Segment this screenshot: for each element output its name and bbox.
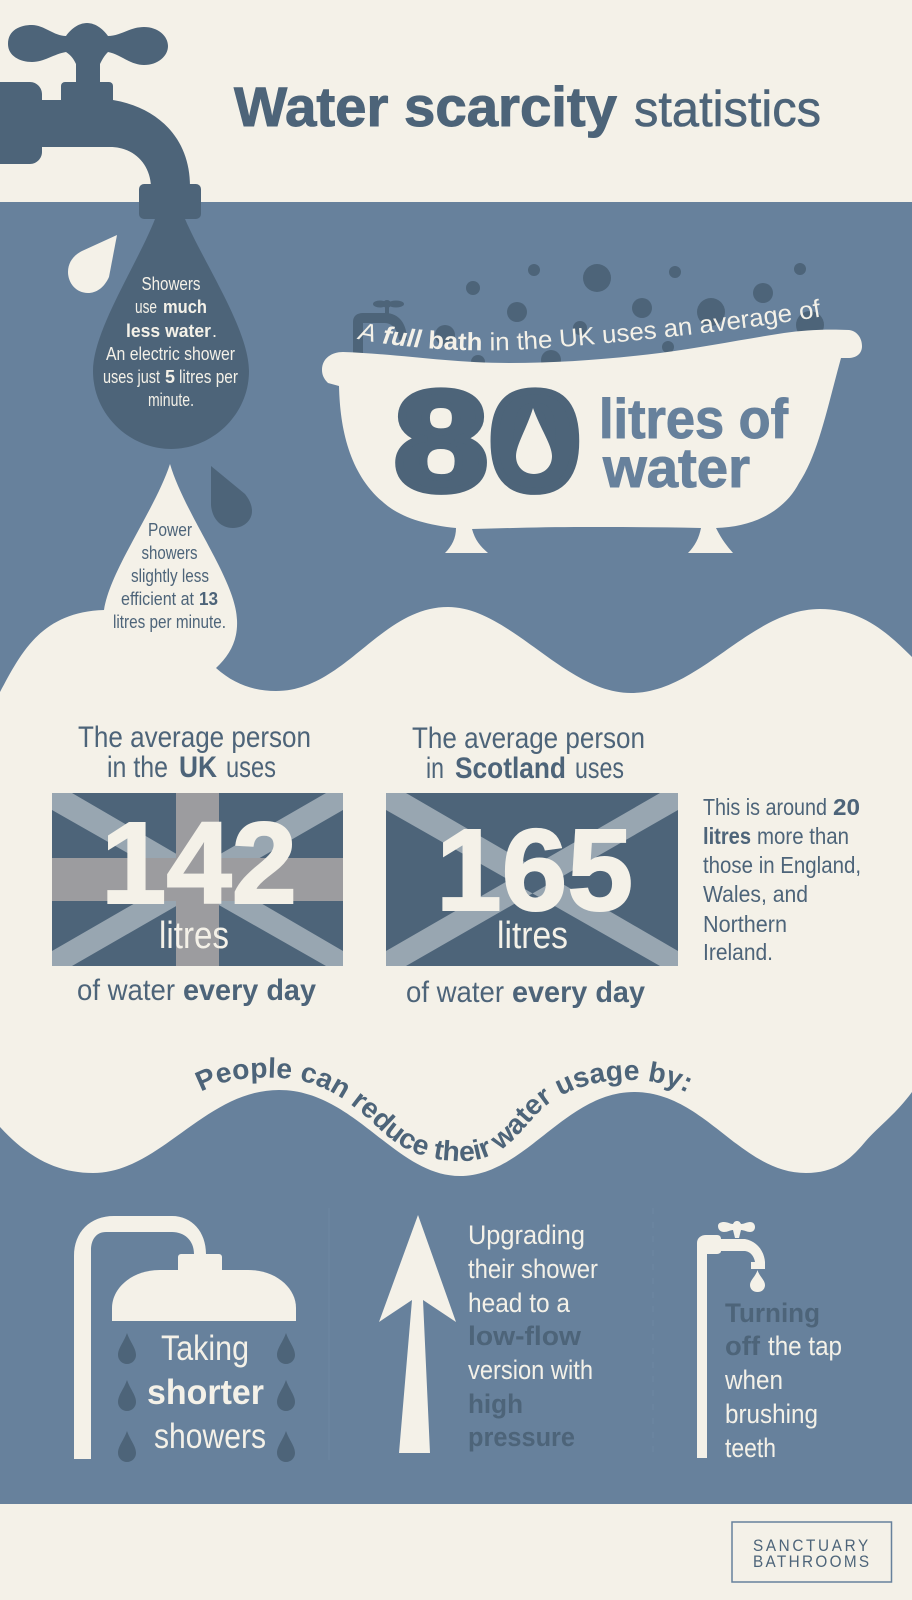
stat: UK heading	[78, 721, 311, 784]
curved heading: reduce water usage: People can reduce their water usage by:	[194, 1057, 691, 1162]
text block: Scotland comparison: 20	[833, 794, 860, 820]
stat: Scotland heading	[412, 722, 645, 785]
icon: shower droplets	[118, 1333, 295, 1462]
icon: bath tap	[353, 300, 407, 360]
shower drop callout: minute.	[148, 390, 194, 410]
bubbles	[435, 263, 824, 370]
title: statistics	[634, 81, 821, 137]
flag: UK with 142 litres: 142	[101, 798, 297, 928]
stat: Scotland heading: in	[426, 752, 444, 785]
power shower drop callout: litres per minute.	[113, 612, 226, 632]
text block: taking shorter showers	[147, 1329, 266, 1456]
stat: UK heading: in the	[107, 751, 168, 784]
flag: UK with 142 litres	[52, 793, 343, 966]
text block: turning off the tap: when	[724, 1365, 783, 1395]
flag: Scotland with 165 litres: litres	[497, 915, 568, 957]
text block: turning off the tap: teeth	[725, 1433, 776, 1463]
text block: turning off the tap: off	[725, 1331, 761, 1361]
text block: low-flow shower head: high	[468, 1389, 523, 1419]
stat: Scotland every day	[406, 976, 645, 1009]
text block: Scotland comparison: those in England,	[703, 852, 861, 878]
icon: small cream droplet	[68, 235, 117, 293]
text block: Scotland comparison: This is around	[703, 794, 827, 820]
stat: Scotland heading: The average person	[412, 722, 645, 755]
text block: low-flow shower head	[468, 1220, 598, 1452]
power shower drop callout: Power	[148, 520, 192, 540]
power shower drop callout	[104, 464, 237, 692]
stat: UK heading: The average person	[78, 721, 311, 754]
power shower drop callout: 13	[199, 589, 218, 609]
shower drop callout: much	[163, 297, 207, 317]
text block: low-flow shower head: version with	[468, 1355, 593, 1385]
text block: turning off the tap: brushing	[725, 1399, 818, 1429]
text block: taking shorter showers: showers	[154, 1417, 266, 1456]
text block: turning off the tap: Turning	[725, 1298, 820, 1328]
icon: small dark droplet	[211, 466, 252, 528]
stat: UK every day: every day	[183, 974, 316, 1007]
logo: Sanctuary Bathrooms: BATHROOMS	[753, 1552, 869, 1571]
text block: low-flow shower head: head to a	[468, 1288, 571, 1318]
shower drop callout: uses just	[103, 367, 160, 387]
stat: Scotland heading: Scotland	[455, 752, 566, 785]
stat: Scotland every day: every day	[512, 976, 645, 1009]
flag: UK with 142 litres: litres	[159, 915, 229, 957]
icon: shower	[74, 1216, 296, 1459]
icon: bathtub	[322, 330, 862, 553]
power shower drop callout: showers	[142, 543, 198, 563]
big number: 80: 80	[394, 362, 582, 521]
stat: Scotland every day: of water	[406, 976, 504, 1009]
shower drop callout	[93, 219, 249, 449]
curved bath caption: A full bath in the UK uses an average of	[356, 298, 820, 350]
shower drop callout: litres per	[179, 367, 238, 387]
text block: low-flow shower head: low-flow	[468, 1321, 582, 1351]
text block: taking shorter showers: shorter	[147, 1373, 264, 1412]
shower drop callout: use	[135, 297, 157, 317]
bath caption: litres of water	[599, 387, 788, 499]
stat: UK every day	[77, 974, 316, 1007]
shower drop callout: less water	[126, 321, 211, 341]
shower drop callout: Showers	[142, 274, 200, 294]
stat: UK heading: uses	[226, 751, 276, 784]
text block: taking shorter showers: Taking	[161, 1329, 249, 1368]
text block: Scotland comparison: Ireland.	[703, 939, 773, 965]
text block: Scotland comparison	[703, 794, 861, 965]
text block: Scotland comparison: Wales, and	[703, 881, 808, 907]
shower drop callout: An electric shower	[106, 344, 235, 364]
text block: turning off the tap: the tap	[768, 1331, 842, 1361]
stat: UK heading: UK	[179, 751, 217, 784]
bath caption: litres of water: water	[602, 436, 750, 499]
stat: Scotland heading: uses	[575, 752, 624, 785]
panel: top water band with wave edge	[0, 202, 912, 693]
text block: low-flow shower head: their shower	[468, 1254, 598, 1284]
text block: Scotland comparison: more than	[757, 823, 849, 849]
power shower drop callout: slightly less	[131, 566, 209, 586]
power shower drop callout: efficient at	[121, 589, 194, 609]
text block: turning off the tap	[724, 1298, 842, 1463]
stat: UK every day: of water	[77, 974, 175, 1007]
title	[234, 75, 821, 138]
flag: Scotland with 165 litres: 165	[436, 805, 633, 935]
panel: bottom water band with wave edge	[0, 1090, 912, 1504]
flag: Scotland with 165 litres	[386, 793, 678, 966]
shower drop callout: 5	[165, 367, 175, 387]
text block: Scotland comparison: Northern	[703, 911, 787, 937]
shower drop callout: .	[212, 321, 217, 341]
icon: large tap	[0, 23, 201, 219]
logo: Sanctuary Bathrooms: SANCTUARY	[753, 1536, 868, 1555]
icon: bathroom tap	[697, 1221, 765, 1458]
bath caption: litres of water: litres of	[599, 387, 788, 450]
text block: low-flow shower head: pressure	[468, 1422, 575, 1452]
title: Water scarcity	[234, 75, 617, 138]
icon: up arrow	[379, 1215, 456, 1453]
logo: Sanctuary Bathrooms	[732, 1522, 892, 1582]
text block: Scotland comparison: litres	[703, 823, 751, 849]
text block: low-flow shower head: Upgrading	[468, 1220, 585, 1250]
